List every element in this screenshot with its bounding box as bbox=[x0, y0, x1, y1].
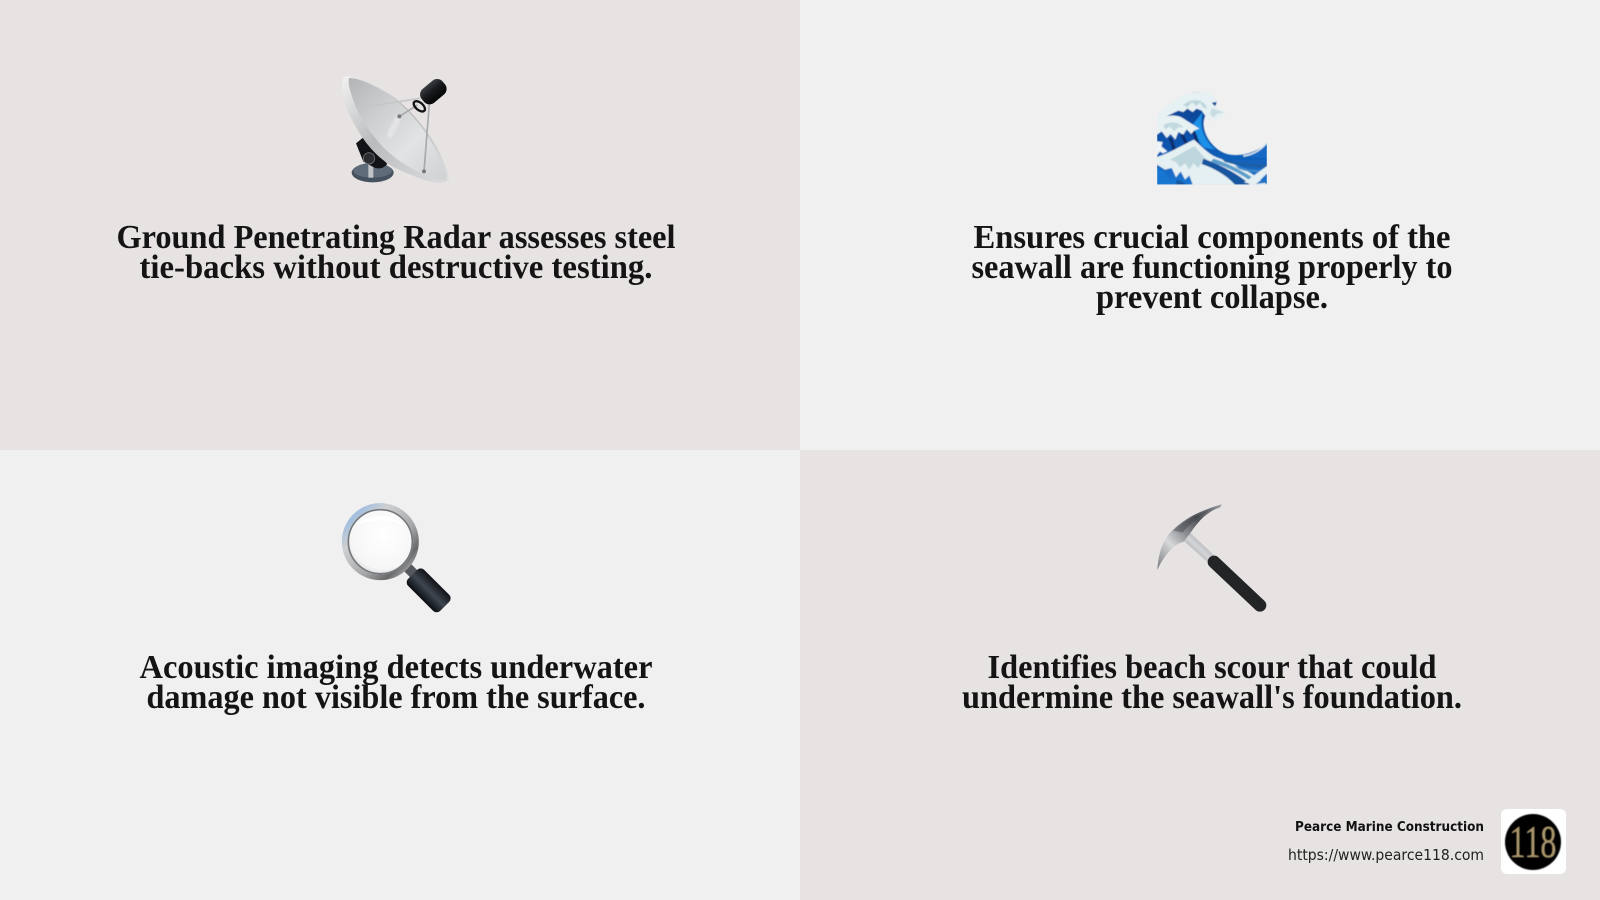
heading: components text: seawall are functioning properly to bbox=[972, 249, 1452, 286]
heading: acoustic text: damage not visible from the surface. bbox=[146, 679, 646, 716]
heading: scour text: undermine the seawall's foundation. bbox=[962, 679, 1462, 716]
logo: 118 badge: 118 bbox=[1510, 816, 1556, 867]
panel: ground penetrating radar bbox=[0, 0, 800, 450]
heading: radar text bbox=[116, 219, 676, 286]
heading: scour text bbox=[962, 649, 1462, 716]
footer: company name: Pearce Marine Construction bbox=[1295, 819, 1484, 835]
heading: radar text: tie-backs without destructive testing. bbox=[140, 249, 652, 286]
heading: components text: Ensures crucial components of the bbox=[974, 219, 1450, 256]
panel: beach scour bbox=[800, 450, 1600, 900]
heading: components text: prevent collapse. bbox=[1096, 279, 1328, 316]
icon: ocean wave bbox=[1157, 92, 1267, 185]
heading: radar text: Ground Penetrating Radar assesses steel bbox=[116, 219, 676, 256]
heading: acoustic text bbox=[140, 649, 652, 716]
icon: satellite dish bbox=[342, 76, 450, 183]
panel: acoustic imaging bbox=[0, 450, 800, 900]
panel: seawall components bbox=[972, 92, 1452, 315]
logo: 118 badge bbox=[1501, 809, 1566, 874]
icon: pick bbox=[1157, 504, 1260, 605]
footer: website url: https://www.pearce118.com bbox=[1288, 846, 1484, 864]
heading: scour text: Identifies beach scour that could bbox=[988, 649, 1437, 686]
heading: components text bbox=[972, 219, 1452, 316]
heading: acoustic text: Acoustic imaging detects underwater bbox=[140, 649, 652, 686]
icon: magnifying glass bbox=[345, 506, 453, 614]
